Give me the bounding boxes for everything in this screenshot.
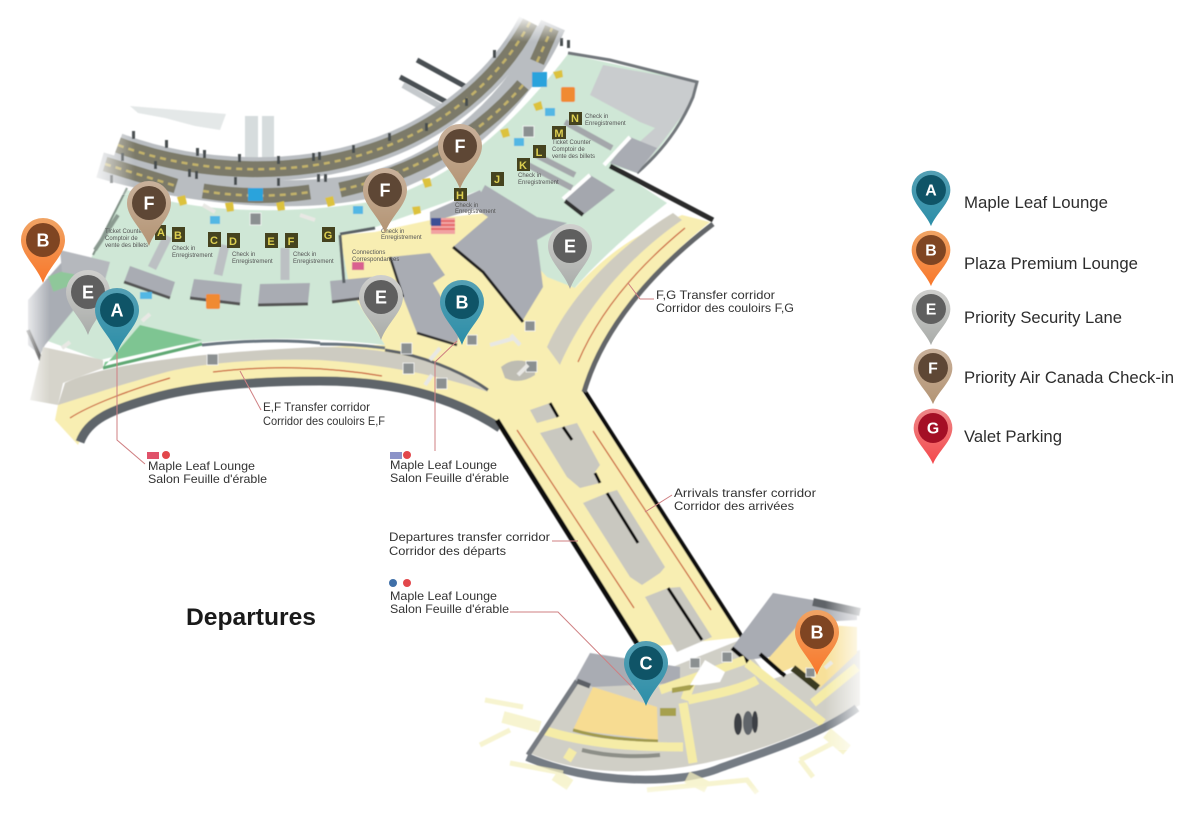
label: departures transfer corridor: Departures transfer corridor xyxy=(389,530,550,544)
legend: Valet Parking xyxy=(914,409,1062,464)
small icons xyxy=(62,70,832,677)
check-in letter signs: A xyxy=(157,227,165,239)
terminal C rim xyxy=(527,708,857,780)
terminal C floor xyxy=(527,640,860,771)
elevator icons xyxy=(207,126,815,677)
small check-in labels: Ticket Counter xyxy=(552,140,591,146)
E,F corridor band xyxy=(58,347,488,405)
small check-in labels: Check in xyxy=(381,229,404,235)
small check-in labels: Comptoir de xyxy=(552,147,585,153)
check-in letter signs: E xyxy=(267,236,275,248)
leader lines xyxy=(117,283,672,690)
small check-in labels: vente des billets xyxy=(105,243,148,249)
small check-in labels xyxy=(105,114,626,265)
small check-in labels: Check in xyxy=(455,203,478,209)
icon: wheelchair xyxy=(532,72,547,87)
pin: B teal: B xyxy=(456,292,468,312)
green check-in floor xyxy=(45,54,697,360)
escalators xyxy=(62,205,832,668)
legend: Priority Air Canada Check-in xyxy=(914,349,1174,404)
terminal map base xyxy=(28,22,860,793)
pin: B plaza left: B xyxy=(36,230,50,250)
roof grey right xyxy=(590,65,697,165)
label: arrivals transfer corridor: Arrivals transfer corridor xyxy=(674,486,816,500)
check-in letter signs: L xyxy=(536,147,543,159)
F,G corridor band xyxy=(547,213,682,365)
small check-in labels: Check in xyxy=(293,252,316,258)
small check-in labels: Enregistrement xyxy=(518,180,559,186)
pier stubs xyxy=(480,700,847,793)
arm inner blocks xyxy=(501,360,712,652)
small check-in labels: vente des billets xyxy=(552,154,595,160)
yellow corridors and concourse xyxy=(55,213,742,648)
legend: Priority Security Lane: E xyxy=(926,302,936,319)
legend: Plaza Premium Lounge: B xyxy=(925,243,937,260)
roads xyxy=(100,22,553,196)
label: Maple Leaf Lounge C xyxy=(389,579,509,616)
icon: info orange xyxy=(206,294,220,309)
legend: Valet Parking: Valet Parking xyxy=(964,427,1062,446)
central grey buildings xyxy=(453,185,567,320)
white atrium xyxy=(690,660,725,685)
label: Maple Leaf Lounge A: Maple Leaf Lounge xyxy=(148,459,255,473)
check-in letter signs: H xyxy=(456,190,464,202)
check-in letter signs: C xyxy=(210,235,218,247)
small check-in labels: Enregistrement xyxy=(172,253,213,259)
check-in letter signs: K xyxy=(519,160,527,172)
label: Maple Leaf Lounge C: Salon Feuille d'érable xyxy=(390,602,509,616)
heading: Departures: Departures xyxy=(186,604,316,631)
check-in letter signs: D xyxy=(229,236,237,248)
label: E,F transfer corridor: E,F Transfer corridor xyxy=(263,400,370,414)
check-in letter signs: B xyxy=(174,230,182,242)
road posts xyxy=(110,38,570,186)
label: Maple Leaf Lounge C: Maple Leaf Lounge xyxy=(390,589,497,603)
pin: E security centre: E xyxy=(375,288,387,308)
pin: F check-in east xyxy=(438,124,482,189)
pin: B plaza left xyxy=(21,218,65,283)
pin: E security left: E xyxy=(82,282,94,302)
pin: A maple leaf: A xyxy=(110,300,124,320)
label: arrivals transfer corridor: Corridor des arrivées xyxy=(674,499,794,513)
rail connector xyxy=(400,60,468,105)
check-in letter signs xyxy=(155,112,582,248)
legend: Priority Air Canada Check-in: F xyxy=(928,361,938,378)
red direction arrows xyxy=(70,228,711,610)
legend: Maple Leaf Lounge: A xyxy=(925,183,937,200)
icon: info orange xyxy=(561,87,575,102)
small check-in labels: Ticket Counter xyxy=(105,229,144,235)
check-in islands xyxy=(60,122,612,305)
pin: B teal xyxy=(440,280,484,345)
label: Maple Leaf Lounge B xyxy=(390,451,509,485)
small check-in labels: Enregistrement xyxy=(232,259,273,265)
legend: Maple Leaf Lounge xyxy=(912,171,1108,226)
legend: Plaza Premium Lounge: Plaza Premium Lounge xyxy=(964,254,1138,273)
legend xyxy=(912,171,1174,464)
small check-in labels: Correspondances xyxy=(352,257,399,263)
pin: E security centre xyxy=(359,275,403,340)
icon: wheelchair xyxy=(248,188,263,201)
check-in letter signs: J xyxy=(494,174,500,186)
yellow drop-off markers xyxy=(177,70,563,215)
terminal C corridors xyxy=(543,660,857,763)
faded building at top left xyxy=(130,106,274,165)
small check-in labels: Connections xyxy=(352,250,385,256)
label: F,G transfer corridor: Corridor des couloirs F,G xyxy=(656,301,794,315)
dark green lounge xyxy=(103,325,202,368)
legend: Plaza Premium Lounge xyxy=(912,231,1138,286)
pin: A maple leaf xyxy=(95,288,139,353)
small check-in labels: Comptoir de xyxy=(105,236,138,242)
pin: F check-in west xyxy=(127,181,171,246)
check-in letter signs: G xyxy=(324,230,332,242)
small check-in labels: Enregistrement xyxy=(455,209,496,215)
small check-in labels: Check in xyxy=(172,246,195,252)
pin: E security east: E xyxy=(564,236,576,256)
pin: E security left xyxy=(66,270,110,335)
label: Maple Leaf Lounge B: Maple Leaf Lounge xyxy=(390,458,497,472)
pin: F check-in centre: F xyxy=(380,180,390,200)
pin: C teal: C xyxy=(640,654,652,674)
legend: Priority Air Canada Check-in: Priority Air Canada Check-in xyxy=(964,368,1174,387)
label: Maple Leaf Lounge A: Salon Feuille d'érable xyxy=(148,472,267,486)
small check-in labels: Check in xyxy=(232,252,255,258)
connections pink box xyxy=(352,262,364,270)
pin: F check-in west: F xyxy=(144,194,154,214)
legend: Priority Security Lane xyxy=(912,290,1122,345)
pin: C teal xyxy=(624,641,668,706)
left grey wing xyxy=(28,262,108,355)
small check-in labels: Check in xyxy=(518,173,541,179)
small check-in labels: Enregistrement xyxy=(585,121,626,127)
pin: F check-in east: F xyxy=(454,136,466,156)
small check-in labels: Enregistrement xyxy=(293,259,334,265)
pin: B plaza east xyxy=(795,610,839,675)
check-in letter signs: M xyxy=(554,128,564,140)
label: Maple Leaf Lounge B: Salon Feuille d'érable xyxy=(390,471,509,485)
corridor edges xyxy=(80,381,500,442)
pin: F check-in centre xyxy=(363,168,407,233)
pin: E security east xyxy=(548,224,592,289)
label: E,F transfer corridor: Corridor des couloirs E,F xyxy=(263,414,385,428)
atrium icon xyxy=(734,711,758,735)
label: Maple Leaf Lounge A xyxy=(147,451,267,486)
pin: B plaza east: B xyxy=(810,622,824,642)
label: F,G transfer corridor: F,G Transfer corridor xyxy=(656,288,775,302)
legend: Valet Parking: G xyxy=(927,421,939,438)
icon: large US flag xyxy=(431,218,455,234)
small check-in labels: Enregistrement xyxy=(381,235,422,241)
check-in letter signs: F xyxy=(288,236,295,248)
blue markers xyxy=(140,108,555,299)
fading edges xyxy=(20,14,870,805)
small check-in labels: Check in xyxy=(585,114,608,120)
label: departures transfer corridor: Corridor des départs xyxy=(389,544,506,558)
check-in letter signs: N xyxy=(571,113,579,125)
legend: Maple Leaf Lounge: Maple Leaf Lounge xyxy=(964,193,1108,212)
legend: Priority Security Lane: Priority Security Lane xyxy=(964,308,1122,327)
